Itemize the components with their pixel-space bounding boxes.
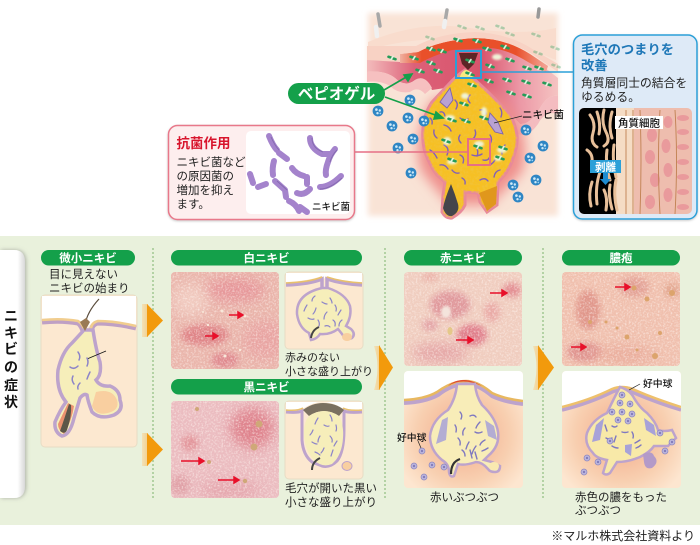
callout frame: pore detail square [456, 51, 481, 78]
hair root [443, 184, 458, 216]
panel: top skin cross-section illustration [367, 9, 560, 220]
arrows from gel label [384, 74, 443, 119]
stage caption: 目に見えない [49, 268, 118, 281]
corneocyte label: 角質細胞 [618, 116, 660, 130]
side heading tab: ビ [4, 341, 18, 357]
pore opening [459, 53, 478, 70]
stage caption [49, 268, 130, 295]
stage pill [171, 250, 362, 266]
cross-section illustration [562, 371, 681, 488]
stage caption: 小さな盛り上がり [285, 364, 373, 378]
side heading tab: キ [4, 325, 18, 341]
stage caption [575, 490, 667, 517]
salmon glow around follicle [418, 88, 525, 205]
skin photo [170, 401, 279, 500]
bacteria image panel [246, 131, 350, 214]
stage caption: 毛穴が開いた黒い [285, 481, 377, 495]
pale drug particles [426, 26, 560, 68]
peeling label and arrow [590, 160, 621, 185]
side heading tab [0, 250, 25, 498]
label: gel product pill: ベピオゲル [298, 84, 376, 103]
label: neutrophil: 好中球 [643, 377, 673, 390]
stage caption: ニキビの始まり [49, 281, 130, 295]
stage pill [171, 379, 362, 394]
column: black comedo [170, 379, 377, 509]
stage pill: 微小ニキビ [59, 251, 117, 265]
label: neutrophil: 好中球 [397, 431, 427, 444]
stage pill [404, 250, 522, 266]
stage pill [41, 250, 135, 266]
label: gel product pill [288, 83, 385, 104]
footnote: source: ※マルホ株式会社資料より [551, 528, 695, 543]
epidermis band [400, 38, 548, 72]
follicle body filled with sebum [423, 70, 517, 218]
side heading tab: 症 [4, 377, 18, 393]
stage caption: 赤みのない [285, 351, 340, 364]
illustration [41, 295, 137, 447]
sebum mottling [420, 68, 520, 220]
column: red pimple [397, 250, 523, 504]
stage caption [285, 481, 377, 509]
panel: pore improvement callout [574, 35, 697, 219]
bacteria rods [250, 136, 341, 212]
panel: symptoms band background [0, 236, 700, 525]
bacteria in follicle [430, 95, 505, 184]
hairs [376, 9, 539, 36]
cross-section illustration [285, 401, 363, 479]
side heading tab: の [4, 359, 18, 375]
connector: pore to blue callout [481, 71, 574, 73]
callout body text: ニキビ菌など [176, 156, 246, 169]
side heading tab: 状 [4, 394, 18, 410]
white highlights in follicle [443, 54, 507, 164]
follicle gland [479, 186, 497, 211]
column: pustule [562, 250, 681, 517]
leader: bacteria label line [494, 116, 522, 123]
immune cells [373, 95, 548, 202]
arrow: to pustule [533, 345, 554, 390]
stage pill: 白ニキビ [244, 251, 290, 265]
callout body text: 角質層同士の結合を [581, 76, 687, 90]
micrograph [579, 108, 692, 214]
stage caption: 赤色の膿をもった [575, 490, 667, 504]
stage pill: 赤ニキビ [440, 251, 486, 265]
skin photo [562, 272, 680, 366]
stage pill: 膿疱 [610, 251, 633, 265]
callout body text: ます。 [176, 198, 210, 211]
skin photo [171, 272, 287, 369]
stage caption: 赤いぶつぶつ [430, 491, 499, 504]
stage pill [562, 250, 680, 266]
cross-section illustration [285, 272, 363, 349]
skin photo [404, 272, 522, 366]
bacteria clusters [440, 88, 503, 134]
cross-section illustration [404, 371, 523, 488]
callout heading: 毛穴のつまりを [581, 41, 674, 57]
peeling label and arrow: 剥離 [595, 160, 616, 174]
callout heading: 抗菌作用 [176, 135, 230, 151]
column: white comedo [171, 250, 373, 378]
callout frame: bacteria detail square [468, 139, 490, 165]
stage caption: ぶつぶつ [575, 504, 621, 517]
callout body text: ゆるめる。 [581, 90, 640, 104]
panel: antibacterial action callout [168, 126, 354, 220]
stage caption: 小さな盛り上がり [285, 495, 377, 509]
callout body text [176, 156, 246, 211]
arrow: micro to white and black comedones [142, 304, 163, 466]
stage pill: 黒ニキビ [244, 380, 290, 394]
stage caption [285, 351, 373, 378]
arrow: to red pimple [374, 345, 393, 390]
lower dermis pale edge [367, 72, 432, 94]
upper skin folds [368, 26, 556, 60]
side heading tab: ニ [4, 308, 18, 324]
skin base [368, 13, 558, 216]
callout body text [581, 76, 687, 104]
dermis pink layer [367, 42, 558, 124]
drug particles [388, 38, 550, 162]
callout body text: の原因菌の [176, 170, 234, 183]
callout heading: 改善 [581, 57, 608, 73]
column: microcomedo [41, 250, 137, 447]
bacteria label: ニキビ菌 [312, 201, 350, 213]
callout heading [581, 41, 674, 73]
label: acne bacteria in follicle: ニキビ菌 [522, 108, 564, 121]
connector: bacteria to pink callout [354, 151, 468, 153]
callout body text: 増加を抑え [176, 183, 234, 197]
